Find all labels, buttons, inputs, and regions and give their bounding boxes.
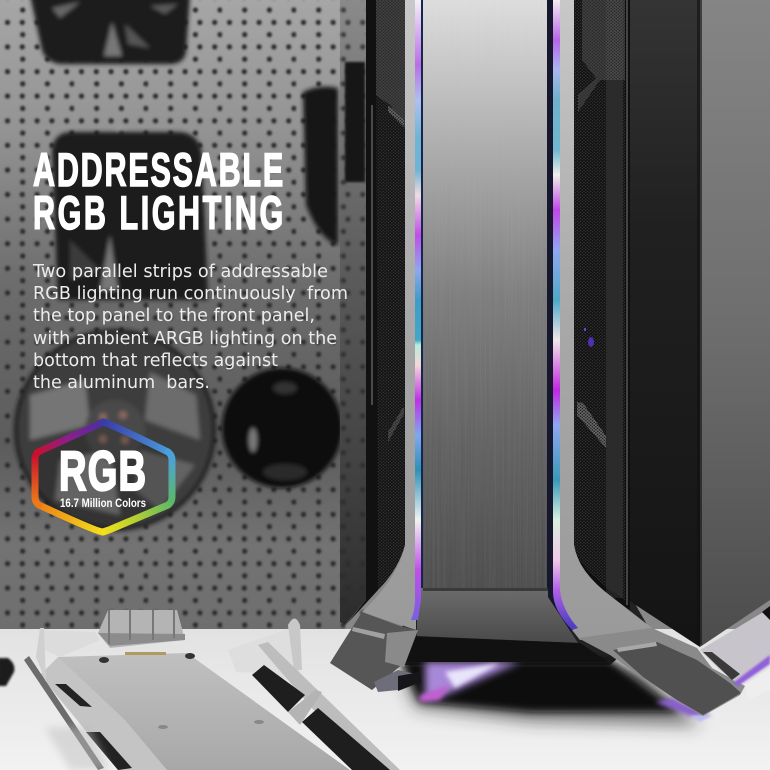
right silver pillar <box>548 0 652 640</box>
left silver pillar <box>362 0 416 630</box>
cable coil at far left <box>0 658 14 686</box>
large dark fan behind the heading <box>52 124 208 300</box>
badge hexagon interior <box>35 424 172 532</box>
title heading <box>33 144 283 240</box>
disassembled panel on the desk <box>0 610 400 770</box>
left case foot <box>330 612 421 692</box>
left rail with dark vents <box>24 628 167 770</box>
shadow beneath the case <box>400 660 700 726</box>
dark edge beside right strip <box>547 0 575 632</box>
body text: bottom that reflects against <box>33 351 278 371</box>
title heading: ADDRESSABLE <box>33 144 283 197</box>
RGB badge <box>35 422 172 532</box>
connector pins and screws <box>99 652 264 729</box>
pegboard wall background <box>0 0 345 635</box>
black side panel <box>628 0 700 647</box>
panel rear fin <box>98 610 185 648</box>
fan hanging at top of the wall <box>30 0 190 64</box>
body text: Two parallel strips of addressable <box>32 262 328 282</box>
reflective area under right side of case <box>700 606 770 700</box>
panel main plate <box>58 653 350 770</box>
right case foot <box>578 628 745 716</box>
right mesh column <box>574 0 630 610</box>
gray side panel <box>700 0 770 647</box>
ambient ARGB light under the case <box>420 662 712 722</box>
body text: with ambient ARGB lighting on the <box>33 329 337 349</box>
left mesh column <box>345 0 405 626</box>
under-case black bar <box>404 636 608 662</box>
body text: the top panel to the front panel, <box>33 306 315 326</box>
body text <box>32 262 348 393</box>
body text: RGB lighting run continuously from <box>33 284 348 304</box>
white desk surface <box>0 629 770 770</box>
body text: the aluminum bars. <box>33 373 210 393</box>
title heading: RGB LIGHTING <box>33 187 283 240</box>
right RGB strip <box>553 0 578 630</box>
reflective front pane <box>340 0 366 625</box>
badge caption: 16.7 Million Colors <box>60 496 146 510</box>
soft shadows on desk under panel <box>45 726 110 770</box>
badge rainbow outline <box>35 422 172 532</box>
PC case <box>340 0 770 665</box>
black cable spool on the wall <box>222 368 342 488</box>
right wing <box>228 628 300 680</box>
round fan at lower left <box>16 331 214 529</box>
dark graphics card on the wall <box>303 87 338 245</box>
backing under the base <box>400 560 650 665</box>
right rail with dark vents <box>252 642 400 770</box>
badge RGB lettering: RGB <box>59 441 146 503</box>
brushed aluminum centre panel <box>422 0 549 590</box>
left RGB strip <box>411 0 421 620</box>
panel left wing <box>40 630 100 657</box>
lower dark front panel <box>417 588 578 643</box>
dark edge beside left strip <box>420 0 423 622</box>
